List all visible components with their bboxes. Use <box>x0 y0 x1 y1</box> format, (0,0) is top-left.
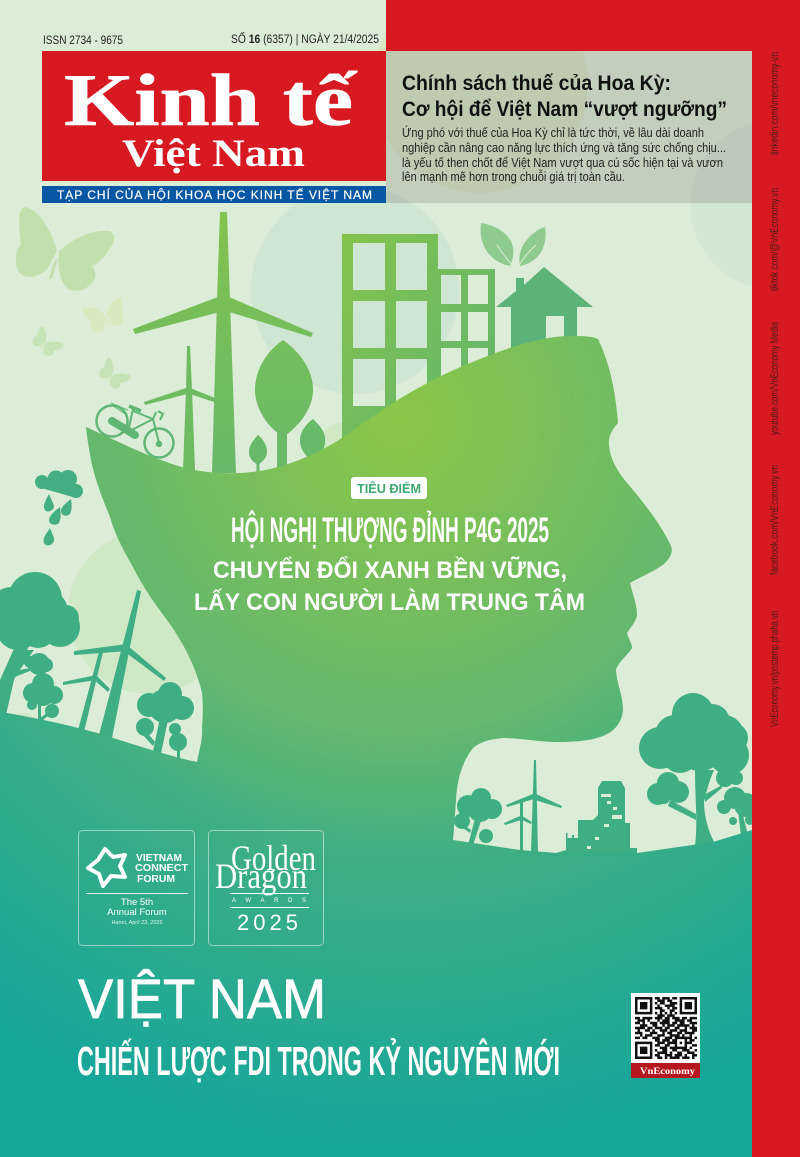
Golden Dragon wordmark: Golden <box>231 838 316 878</box>
forum name: CONNECT <box>135 862 189 874</box>
feature headline: Cơ hội để Việt Nam “vượt ngưỡng” <box>402 98 727 121</box>
buildings <box>342 234 495 470</box>
feature summary <box>402 125 726 184</box>
forum details: Annual Forum <box>107 907 167 918</box>
background circles <box>0 0 800 757</box>
Golden Dragon badge <box>208 830 324 946</box>
tiktok: tiktok.com/@VnEconomy.vn <box>769 188 781 291</box>
feature summary: nghiệp cần nâng cao năng lực thích ứng và tăng sức chống chịu... <box>402 141 726 155</box>
bicycle <box>96 403 174 458</box>
leaf tree large <box>255 340 313 475</box>
feature headline: Chính sách thuế của Hoa Kỳ: <box>402 72 671 95</box>
focus badge: TIÊU ĐIỂM <box>357 481 421 496</box>
feature story panel <box>386 51 752 203</box>
hillside wind turbines <box>63 590 166 738</box>
main title <box>77 967 560 1084</box>
building medium <box>438 269 495 470</box>
left tree small <box>23 673 63 726</box>
Vietnam Connect Forum badge <box>78 830 194 946</box>
forum details: The 5th <box>121 897 153 908</box>
head silhouette with hills <box>0 336 752 1157</box>
logo Kinh tế: Kinh tế <box>64 60 358 142</box>
icon: star <box>88 849 125 886</box>
logo box <box>42 51 386 181</box>
feature summary: Ứng phó với thuế của Hoa Kỳ chỉ là tức thời, về lâu dài doanh <box>402 125 704 140</box>
wind turbine small <box>144 346 215 470</box>
masthead red bands <box>386 0 800 1157</box>
QR code <box>631 993 700 1078</box>
forum name <box>135 852 189 885</box>
butterflies <box>16 207 134 393</box>
leaf tree small right <box>300 419 325 462</box>
year: 2025 <box>237 910 298 935</box>
butterfly pale <box>82 297 124 332</box>
forum details <box>107 897 167 926</box>
logo Việt Nam: Việt Nam <box>122 132 305 175</box>
cloud with rain <box>35 470 83 545</box>
lower right tree <box>639 693 758 845</box>
butterfly small right <box>96 357 134 393</box>
feature summary: là yếu tố then chốt để Việt Nam vượt qua cú sốc hiện tại và vươn <box>402 156 723 170</box>
focus title <box>194 510 585 616</box>
focus title: LẤY CON NGƯỜI LÀM TRUNG TÂM <box>194 588 585 616</box>
forum name: VIETNAM <box>136 852 182 864</box>
lower center wind turbines <box>504 760 562 852</box>
issue number and date: SỐ 16 (6357) | NGÀY 21/4/2025 <box>231 32 379 46</box>
red top band <box>386 0 800 51</box>
VnEconomy label <box>631 1063 700 1078</box>
building tall <box>342 234 438 470</box>
red side band <box>752 0 800 1157</box>
website: VnEconomy.vn/postemp.phaha.vn <box>769 611 781 727</box>
lower center tree <box>454 788 502 845</box>
leaves on house <box>481 223 546 267</box>
hillside tree <box>136 682 194 762</box>
left tree large <box>0 572 80 720</box>
wind turbine large <box>133 212 313 473</box>
tagline bar: TẠP CHÍ CỦA HỘI KHOA HỌC KINH TẾ VIỆT NAM <box>57 187 372 202</box>
focus title: CHUYỂN ĐỔI XANH BỀN VỮNG, <box>213 556 567 584</box>
house <box>496 267 593 350</box>
butterfly large <box>16 207 114 291</box>
side social links <box>769 52 781 727</box>
linkedin: linkedin.com/vneconomy-vn <box>769 52 781 155</box>
Golden Dragon badge: Dragon <box>215 856 307 896</box>
lower city skyline <box>556 781 637 853</box>
ISSN: ISSN 2734 - 9675 <box>43 35 123 47</box>
forum name: FORUM <box>137 873 175 885</box>
forum details: Hanoi, April 23, 2025 <box>111 920 163 926</box>
butterfly small left <box>30 325 67 360</box>
QR code: VnEconomy <box>640 1066 696 1076</box>
awards: AWARDS <box>232 898 306 904</box>
feature headline <box>402 72 727 121</box>
main title: VIỆT NAM <box>78 967 326 1030</box>
youtube: youtube.com/VnEconomy Media <box>769 321 781 435</box>
feature summary: lên mạnh mẽ hơn trong chuỗi giá trị toàn cầu. <box>402 169 625 184</box>
focus badge <box>351 477 427 499</box>
leaf tree small left <box>249 435 267 474</box>
facebook: facebook.com/VnEconomy.vn <box>769 465 781 575</box>
